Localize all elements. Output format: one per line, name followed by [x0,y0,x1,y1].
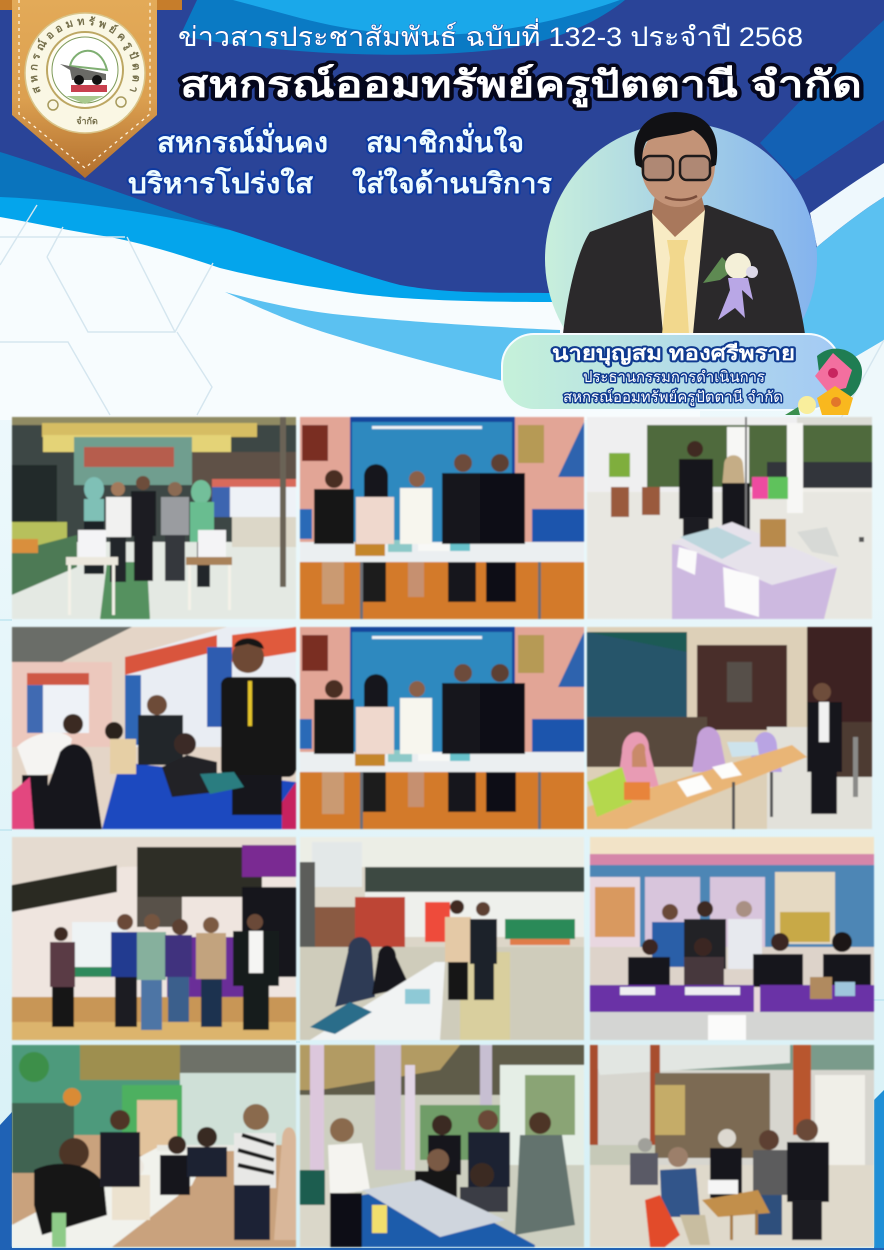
photo: committee of five at table (repeat) [298,626,586,830]
chairman name plate: นายบุญสม ทองศรีพราย [552,342,795,366]
newsletter issue line: ข่าวสารประชาสัมพันธ์ ฉบับที่ 132-3 ประจำปี 2568 [178,18,803,52]
chairman name plate [502,334,862,415]
logo seal [24,12,146,134]
photo: officials behind purple tables [588,836,876,1040]
chairman name plate: สหกรณ์ออมทรัพย์ครูปัตตานี จำกัด [563,389,783,406]
photo: officers at wooden table [586,626,874,830]
logo ribbon badge [0,0,182,178]
photo: registration desk in open hall [586,416,874,620]
photo: committee of five at table [298,416,586,620]
photo: ballot boxes outside school [10,416,298,620]
slogan: บริหารโปร่งใส [128,166,314,199]
chairman portrait [545,112,817,395]
photo: voting table in classroom hall [11,1044,297,1248]
photo grid [12,417,874,1248]
chairman name plate: ประธานกรรมการดำเนินการ [583,369,765,386]
photo: hall with long white table [299,837,585,1041]
slogan: สมาชิกมั่นใจ [366,122,524,158]
photo: elders at small table [588,1044,875,1248]
slogan [128,122,552,199]
icon: tropical flowers [785,349,862,415]
photo: group in front of purple wall [10,836,298,1041]
corsage [703,253,758,320]
slogan: ใส่ใจด้านบริการ [352,167,552,199]
logo seal: จำกัด [76,116,98,126]
photo: blue-skirted table outdoors [299,1044,585,1248]
photo: voters at blue table [11,626,298,830]
slogan: สหกรณ์มั่นคง [157,122,328,158]
organisation title: สหกรณ์ออมทรัพย์ครูปัตตานี จำกัด [180,64,862,108]
